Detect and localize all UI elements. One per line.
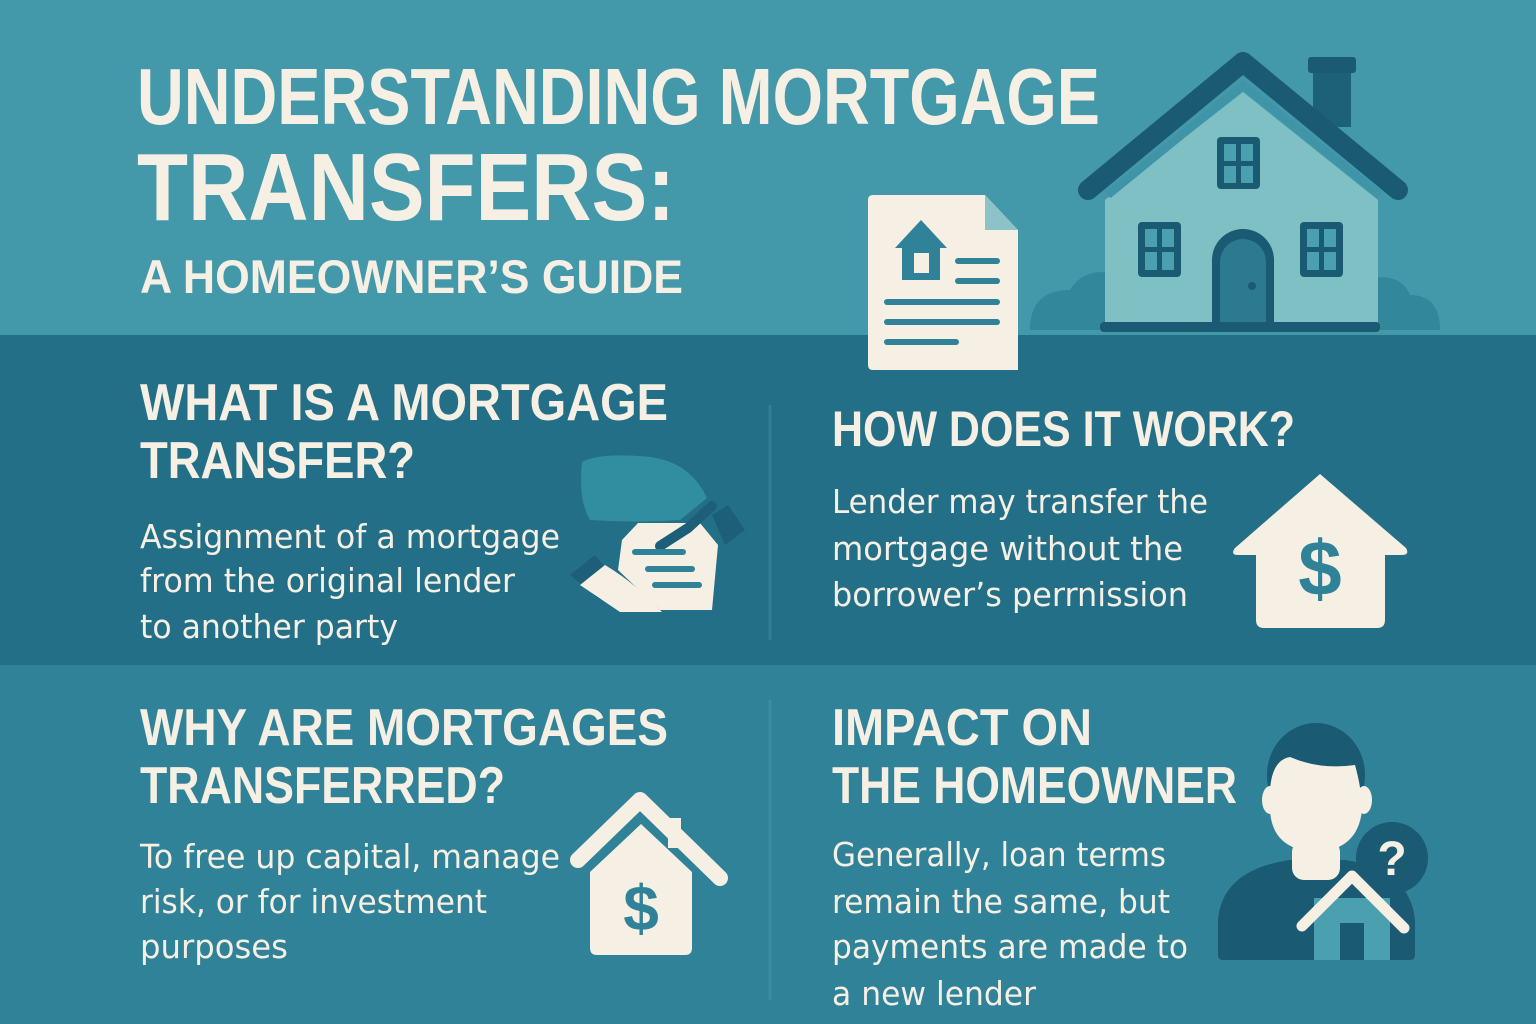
panel: how does it work: mortgage without the bbox=[832, 529, 1183, 568]
title: UNDERSTANDING MORTGAGE bbox=[137, 52, 1100, 141]
panel: how does it work bbox=[832, 401, 1407, 628]
panel: impact on the homeowner: remain the same, but bbox=[832, 882, 1170, 921]
panel: why are mortgages transferred: risk, or for investment bbox=[140, 882, 487, 921]
title: TRANSFERS: bbox=[137, 134, 675, 241]
panel: how does it work: Lender may transfer the bbox=[832, 482, 1208, 521]
title: A HOMEOWNER’S GUIDE bbox=[140, 250, 683, 303]
icon: person with house question: ? bbox=[1377, 833, 1407, 886]
panel: why are mortgages transferred: TRANSFERRED? bbox=[140, 757, 505, 815]
panel: impact on the homeowner: payments are made to bbox=[832, 927, 1188, 966]
panel: why are mortgages transferred: purposes bbox=[140, 927, 288, 966]
panel: impact on the homeowner bbox=[832, 699, 1428, 1013]
panel: what is a mortgage transfer: from the original lender bbox=[140, 561, 515, 600]
icon: house with dollar bbox=[1233, 474, 1407, 628]
icon: house outline with dollar bbox=[578, 800, 720, 955]
panel: how does it work: HOW DOES IT WORK? bbox=[832, 401, 1295, 457]
panel: why are mortgages transferred: WHY ARE MORTGAGES bbox=[140, 699, 668, 757]
panel: what is a mortgage transfer: WHAT IS A MORTGAGE bbox=[140, 374, 668, 432]
panel: what is a mortgage transfer: TRANSFER? bbox=[140, 432, 415, 490]
panel: what is a mortgage transfer: to another party bbox=[140, 607, 398, 646]
panel: impact on the homeowner: IMPACT ON bbox=[832, 699, 1092, 757]
panel: impact on the homeowner: THE HOMEOWNER bbox=[832, 757, 1237, 815]
panel: impact on the homeowner: Generally, loan terms bbox=[832, 835, 1166, 874]
panel: what is a mortgage transfer bbox=[140, 374, 745, 646]
icon: handshake document bbox=[570, 455, 745, 612]
title bbox=[137, 52, 1100, 303]
icon: document bbox=[868, 195, 1018, 370]
illustration: house bbox=[1030, 57, 1440, 332]
icon: person with house question bbox=[1218, 723, 1428, 960]
panel: what is a mortgage transfer: Assignment of a mortgage bbox=[140, 517, 560, 556]
icon: house outline with dollar: $ bbox=[623, 872, 659, 944]
panel: why are mortgages transferred: To free up capital, manage bbox=[139, 837, 560, 876]
icon: house with dollar: $ bbox=[1298, 524, 1342, 612]
panel: impact on the homeowner: a new lender bbox=[832, 974, 1036, 1013]
panel: why are mortgages transferred bbox=[139, 699, 720, 966]
panel: how does it work: borrower’s perrnission bbox=[832, 575, 1188, 614]
